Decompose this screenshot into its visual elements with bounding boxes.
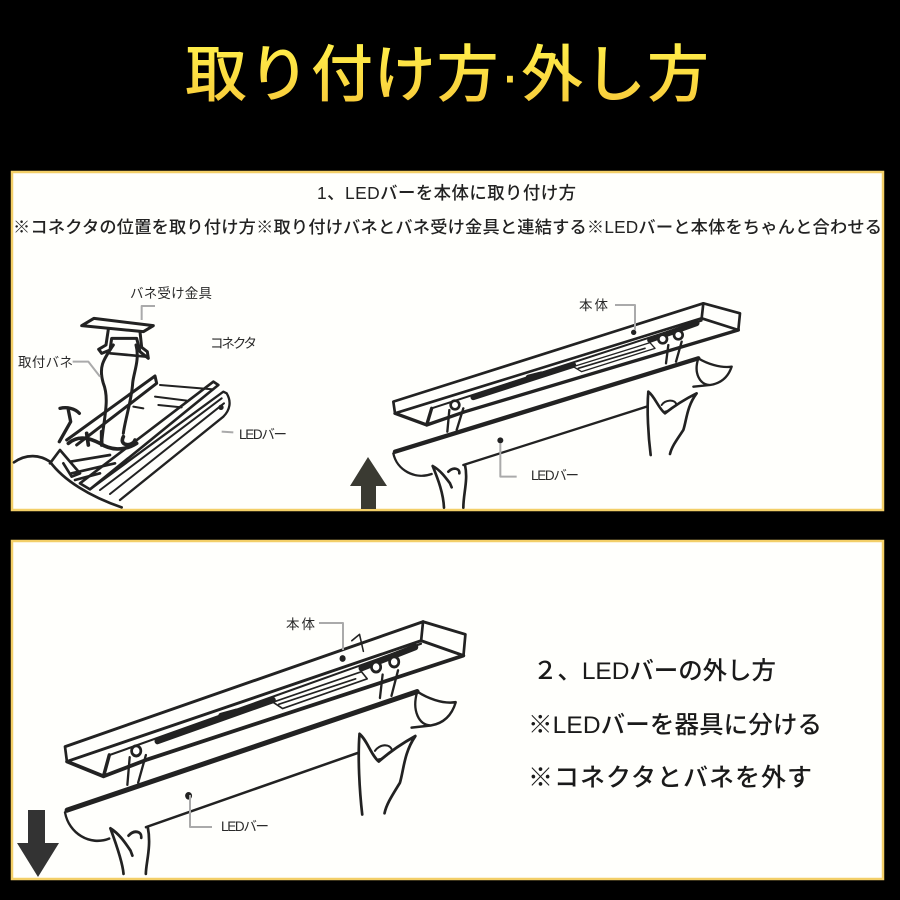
label: main body: 本体 — [286, 617, 316, 632]
label: connector: コネクタ — [210, 336, 257, 351]
heading: step 2: ２、LEDバーの外し方 — [533, 657, 776, 685]
label: LED bar: LEDバー — [221, 819, 269, 834]
diagram: fixture and LED bar being lowered — [65, 617, 465, 874]
label: spring receiver bracket: バネ受け金具 — [130, 286, 212, 301]
text block: step 1 notes: ※コネクタの位置を取り付け方※取り付けバネとバネ受け金具と連結する※LEDバーと本体をちゃんと合わせる — [13, 217, 882, 237]
title: 取り付け方·外し方 — [185, 41, 709, 110]
label: mounting spring: 取付バネ — [18, 355, 73, 370]
text block: note separate bar: ※LEDバーを器具に分ける — [528, 711, 822, 739]
panel: step 2 removal — [12, 541, 883, 879]
diagram: fixture and LED bar being raised — [393, 298, 740, 508]
panel: step 1 install — [12, 172, 883, 510]
arrow: up — [350, 457, 387, 509]
heading: step 1: 1、LEDバーを本体に取り付け方 — [317, 183, 576, 203]
diagram: connector close-up — [14, 286, 287, 507]
label: LED bar: LEDバー — [239, 427, 287, 442]
label: main body: 本体 — [579, 298, 608, 313]
label: LED bar: LEDバー — [531, 468, 579, 483]
arrow: down — [17, 810, 59, 877]
text block: note remove connector and spring: ※コネクタとバネを外す — [528, 764, 812, 792]
